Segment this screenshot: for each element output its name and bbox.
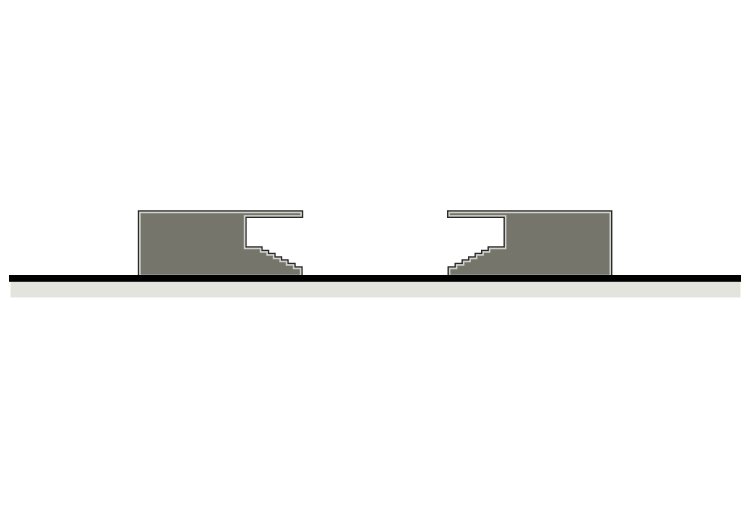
ground: concrete slab bbox=[10, 281, 740, 298]
right structure with stairs bbox=[448, 211, 612, 276]
ground: black line bbox=[9, 275, 741, 282]
left structure with stairs bbox=[138, 211, 302, 276]
